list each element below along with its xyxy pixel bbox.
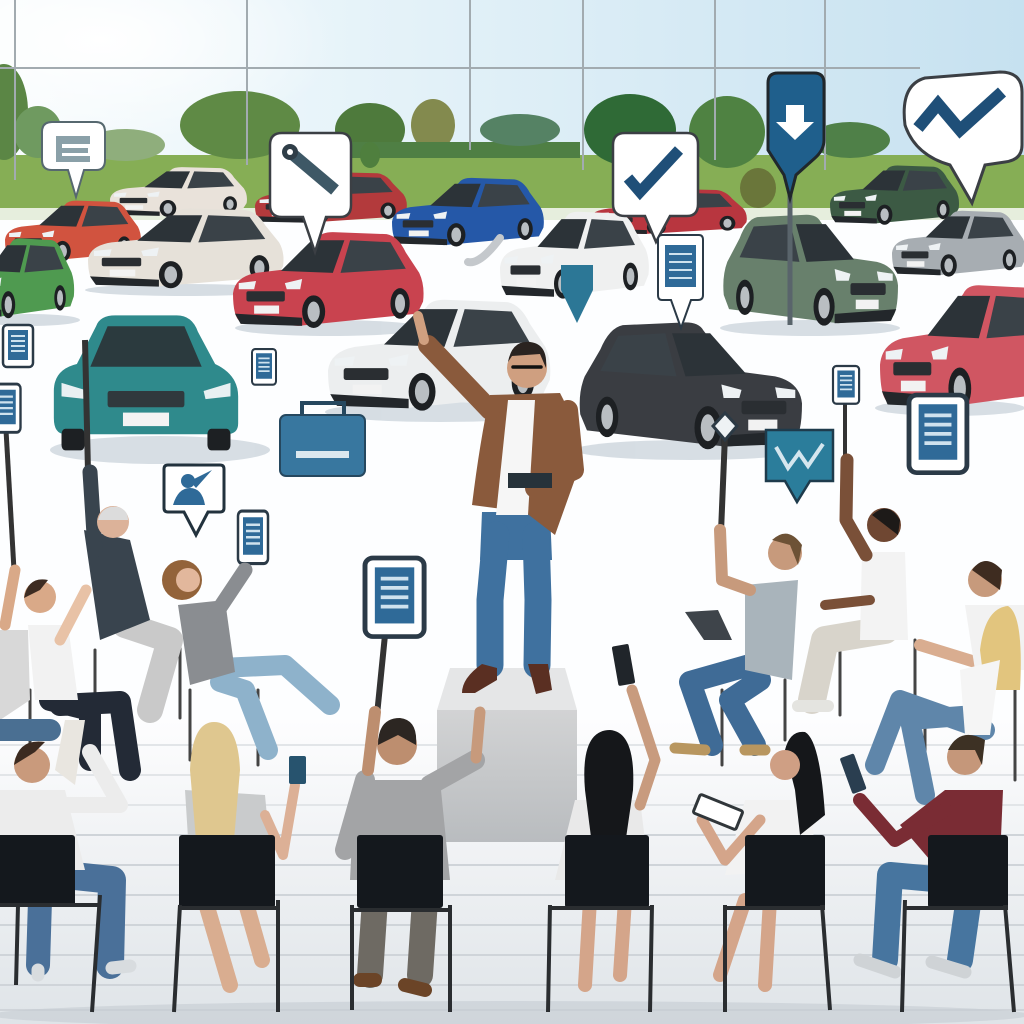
chair 1: [0, 835, 100, 1012]
icon: briefcase: [280, 403, 365, 476]
icon: trend bubble: [904, 72, 1022, 203]
icon: shield: [561, 265, 593, 323]
person: tablet woman: [693, 732, 825, 985]
presenter tablet: [508, 473, 552, 488]
icon: E bubble: [42, 122, 105, 197]
chair 4: [548, 835, 652, 1012]
paddle: teal car stick: [85, 340, 88, 472]
paddle: diamond: [713, 413, 737, 532]
arm: pale hook beside suv: [468, 238, 500, 262]
person: maroon man: [840, 735, 1003, 972]
icon: person bubble: [164, 465, 224, 535]
car shadows: [0, 284, 1024, 464]
car: green left: [0, 238, 74, 318]
car: green suv: [723, 215, 898, 326]
presenter: [418, 316, 580, 694]
car: red right: [880, 285, 1024, 410]
chair 2: [174, 835, 278, 1012]
paddle: small: [252, 349, 276, 385]
car: white-cream sedan: [88, 208, 284, 288]
person: plaid man: [675, 530, 802, 750]
person: man in grey sweater: [345, 712, 480, 990]
chairs: [30, 640, 258, 765]
car: silver: [892, 211, 1024, 277]
front row audience: [0, 644, 1003, 990]
floor boards: [0, 720, 1024, 1024]
person: man white shirt: [24, 579, 130, 770]
paddles held up: [0, 325, 967, 715]
person: right man and blonde: [875, 561, 1024, 795]
car: dark green: [830, 166, 959, 225]
presenter head: [507, 348, 547, 388]
presenter hair: [508, 342, 546, 368]
paddle: large document right: [909, 395, 967, 473]
paddle: far left: [0, 384, 21, 570]
icon: check bubble: [613, 133, 698, 242]
audience right: [675, 460, 1024, 795]
car: white sedan: [328, 300, 550, 411]
person: front left man: [0, 741, 130, 975]
chair 5: [725, 835, 830, 1012]
paddle: large centre: [365, 558, 424, 715]
car: white suv: [500, 212, 649, 299]
chairs right: [722, 640, 1015, 780]
presenter shirt: [496, 400, 535, 515]
car: teal: [54, 315, 238, 450]
presenter arms: [428, 345, 574, 488]
icon: check tag bubble: [766, 430, 833, 502]
car: red sedan: [233, 232, 424, 328]
presenter blazer: [472, 393, 580, 535]
car: red back right: [590, 189, 747, 235]
podium: [437, 668, 577, 842]
chairs front row: [0, 835, 1014, 1012]
audience left: [0, 472, 330, 785]
window sky and landscape: [0, 0, 1024, 220]
icon: document bubble: [658, 235, 703, 328]
paddle: left top: [3, 325, 33, 367]
presenter glasses: [513, 365, 541, 369]
car: black sedan: [580, 322, 802, 449]
person: dark-haired woman: [555, 644, 655, 985]
presenter legs: [490, 535, 538, 665]
person: man in suit: [84, 472, 170, 710]
car: maroon back: [255, 172, 407, 224]
person: blonde woman: [185, 722, 306, 985]
parked cars back row: [0, 166, 1024, 328]
icon: wrench bubble: [270, 133, 351, 252]
paddle: small right: [833, 366, 859, 455]
front row cars: [54, 285, 1024, 450]
paddle: woman: [238, 511, 268, 564]
presenter hand: [418, 316, 424, 340]
person: curly woman: [162, 560, 330, 750]
car: blue: [392, 178, 544, 247]
person: far left edge: [0, 570, 85, 785]
chair 3: [350, 835, 450, 1012]
icon: down arrow sign: [768, 73, 824, 325]
car: cream: [110, 167, 247, 217]
person: man raising arm: [798, 460, 908, 706]
chair 6: [902, 835, 1014, 1012]
presenter hips: [480, 512, 552, 560]
presenter shoes: [462, 664, 552, 694]
car: red back left: [5, 201, 141, 262]
speech bubble signs: [42, 72, 1022, 535]
